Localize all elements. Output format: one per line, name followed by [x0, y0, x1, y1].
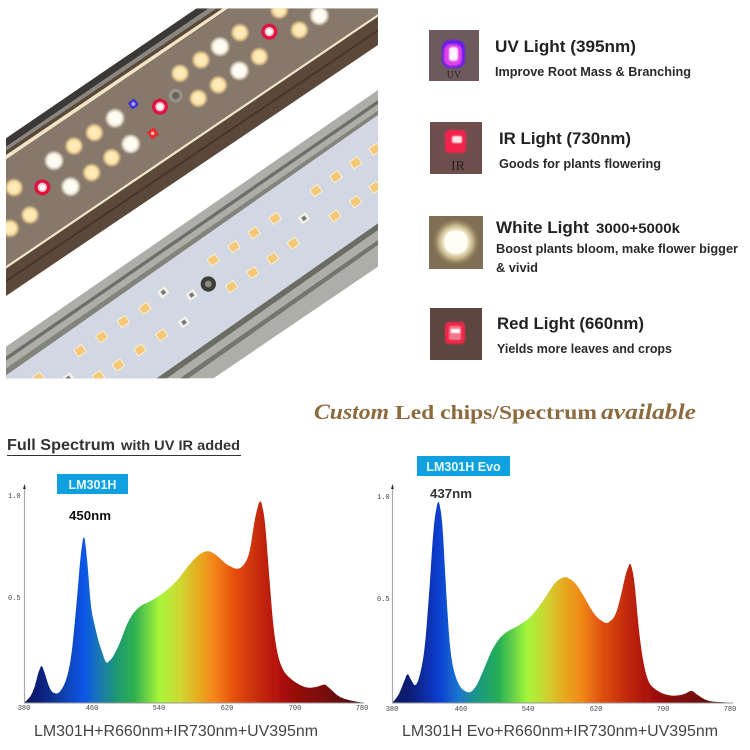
lower bar unlit	[6, 90, 383, 386]
legend: red light: Yields more leaves and crops	[497, 342, 672, 356]
icon: white chip	[429, 216, 483, 269]
legend: UV light	[429, 30, 691, 81]
spectrum curve	[392, 502, 730, 703]
legend: white light: White Light	[496, 218, 589, 237]
badge: LM301H Evo: LM301H Evo	[426, 460, 501, 474]
chart: LM301H Evo spectrum: 540	[522, 706, 534, 714]
chart: LM301H spectrum: 380	[18, 705, 30, 713]
legend: IR light: IR Light (730nm)	[499, 129, 631, 148]
chart: LM301H spectrum: 620	[221, 705, 233, 713]
chart: LM301H spectrum	[8, 474, 368, 740]
chart: LM301H spectrum: 0.5	[8, 595, 21, 603]
icon: red chip	[430, 308, 482, 360]
upper bar lit	[0, 0, 378, 296]
chart: LM301H spectrum: 1.0	[8, 493, 21, 501]
legend: white light: Boost plants bloom, make flower bigger	[496, 242, 738, 256]
legend: white light: & vivid	[496, 261, 538, 275]
legend: IR light: Goods for plants flowering	[499, 157, 661, 171]
heading: custom led chips	[314, 399, 696, 424]
legend: white light	[429, 216, 738, 275]
heading: custom led chips: available	[601, 399, 696, 424]
legend: IR light	[430, 122, 661, 174]
chart: LM301H Evo spectrum: LM301H Evo+R660nm+IR730nm+UV395nm	[402, 723, 718, 740]
chart: LM301H spectrum: 450nm	[69, 508, 111, 523]
legend: red light	[430, 308, 672, 360]
chart: LM301H spectrum: 780	[356, 705, 368, 713]
chart: LM301H Evo spectrum: 0.5	[377, 596, 390, 604]
spectrum curve	[24, 501, 363, 703]
axes	[24, 487, 364, 703]
chart: LM301H spectrum: 700	[289, 705, 301, 713]
chart: LM301H Evo spectrum: 780	[724, 706, 736, 714]
heading: full spectrum	[7, 437, 241, 456]
chart: LM301H Evo spectrum: 460	[455, 706, 467, 714]
chart: LM301H Evo spectrum: 700	[657, 706, 669, 714]
badge: LM301H	[57, 474, 128, 494]
chart: LM301H spectrum: 460	[86, 705, 98, 713]
legend: red light: Red Light (660nm)	[497, 314, 644, 333]
icon: IR chip: IR	[451, 159, 466, 174]
legend: UV light: Improve Root Mass & Branching	[495, 65, 691, 79]
legend: UV light: UV Light (395nm)	[495, 37, 636, 56]
heading: full spectrum: Full Spectrum	[7, 437, 115, 454]
icon: UV chip	[429, 30, 479, 81]
chart: LM301H Evo spectrum: 620	[590, 706, 602, 714]
chart: LM301H spectrum: 540	[153, 705, 165, 713]
heading: full spectrum: with UV IR added	[120, 437, 240, 453]
icon: UV chip: UV	[447, 70, 462, 81]
chart: LM301H Evo spectrum: 1.0	[377, 494, 390, 502]
axes	[392, 487, 733, 703]
badge: LM301H Evo	[417, 456, 510, 476]
photo: LED light bars	[0, 0, 383, 386]
heading: custom led chips: Led chips/Spectrum	[395, 402, 597, 424]
badge: LM301H: LM301H	[69, 478, 116, 492]
chart: LM301H Evo spectrum: 437nm	[430, 486, 472, 501]
chart: LM301H Evo spectrum	[377, 456, 736, 740]
heading: custom led chips: Custom	[314, 399, 389, 424]
icon: IR chip	[430, 122, 482, 174]
legend: white light: 3000+5000k	[596, 220, 680, 236]
chart: LM301H Evo spectrum: 380	[386, 706, 398, 714]
chart: LM301H spectrum: LM301H+R660nm+IR730nm+UV395nm	[34, 723, 318, 740]
